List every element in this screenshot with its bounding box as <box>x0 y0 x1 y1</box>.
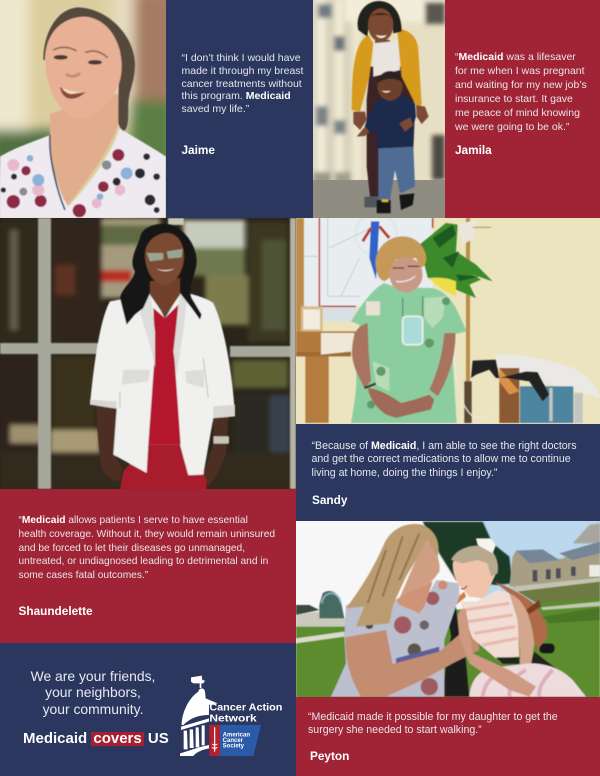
quote text: Sandy: “Because of Medicaid, I am able to see the right doctors <box>312 440 576 452</box>
logo: Cancer Action Network, American Cancer Society <box>180 676 282 756</box>
quote text: Jamila: for me when I was pregnant <box>455 65 585 77</box>
tagline: Medicaid covers US: covers <box>93 730 142 747</box>
quote text: Sandy <box>312 440 576 479</box>
quote text: Sandy: living at home, doing the things I enjoy.” <box>312 467 497 479</box>
icon: capitol dome <box>180 676 218 756</box>
quote text: Jaime: made it through my breast <box>182 65 303 77</box>
quote text: Peyton: surgery she needed to start walking.” <box>308 724 482 736</box>
quote text: Shaundelette: and be forced to let their diseases go unmanaged, <box>18 543 245 554</box>
quote text: Jamila: “Medicaid was a lifesaver <box>455 51 576 63</box>
badge: American Cancer Society: Society <box>223 743 245 749</box>
quote text: Shaundelette: some cases fatal outcomes.” <box>18 570 148 581</box>
name: Jamila: Jamila <box>455 143 492 157</box>
badge: American Cancer Society: Cancer <box>223 738 244 744</box>
quote text: Jamila: we were going to be ok.” <box>455 121 569 133</box>
quote text: Shaundelette: untreated, or undiagnosed leading to detrimental and in <box>18 556 268 567</box>
badge: American Cancer Society <box>209 725 261 756</box>
photo: Jamila and her son <box>313 0 445 218</box>
photo: Peyton and her daughter in the park <box>296 521 600 697</box>
quote text: Peyton <box>308 711 558 736</box>
label: Cancer Action Network: Cancer Action <box>209 703 282 714</box>
quote text: Jaime: “I don’t think I would have <box>182 52 301 64</box>
quote text: Jaime: this program. Medicaid <box>182 90 291 102</box>
name: Shaundelette: Shaundelette <box>18 604 93 618</box>
name: Sandy: Sandy <box>312 493 347 507</box>
photo: Shaundelette in a white coat <box>0 218 296 489</box>
slogan: we are your friends: your neighbors, <box>45 684 141 700</box>
quote text: Shaundelette <box>18 515 275 581</box>
photo: Sandy standing by a stained glass window <box>296 218 600 424</box>
tagline: Medicaid covers US: Medicaid US <box>23 730 169 747</box>
name: Peyton: Peyton <box>310 749 349 763</box>
name: Jaime: Jaime <box>182 143 215 157</box>
panel: Jaime quote <box>166 0 313 218</box>
slogan: we are your friends <box>30 668 155 717</box>
quote text: Jaime: cancer treatments without <box>182 78 302 90</box>
logo: Cancer Action Network, American Cancer Society: Network <box>209 714 257 725</box>
slogan: we are your friends: We are your friends, <box>31 668 155 684</box>
quote text: Jaime <box>182 52 304 115</box>
quote text: Jamila: insurance to start. It gave <box>455 93 573 105</box>
quote text: Peyton: “Medicaid made it possible for my daughter to get the <box>308 711 558 723</box>
panel: Peyton quote <box>296 697 600 776</box>
quote text: Jamila: me peace of mind knowing <box>455 107 580 119</box>
quote text: Shaundelette: “Medicaid allows patients I serve to have essential <box>18 515 248 526</box>
quote text: Shaundelette: health coverage. Without it, they would remain uninsured <box>18 529 275 540</box>
panel: Jamila quote <box>445 0 600 218</box>
panel: closing message and logo <box>0 643 296 776</box>
panel: Sandy quote <box>296 424 600 521</box>
slogan: we are your friends: your community. <box>43 701 143 717</box>
photo: Jaime portrait <box>0 0 166 218</box>
quote text: Sandy: and get the correct medications to allow me to continue <box>312 453 571 465</box>
quote text: Jamila: and waiting for my new job’s <box>455 79 587 91</box>
quote text: Jaime: saved my life.” <box>182 103 249 115</box>
panel: Shaundelette quote <box>0 489 296 643</box>
quote text: Jamila <box>455 51 587 133</box>
badge: American Cancer Society: American <box>223 733 250 739</box>
